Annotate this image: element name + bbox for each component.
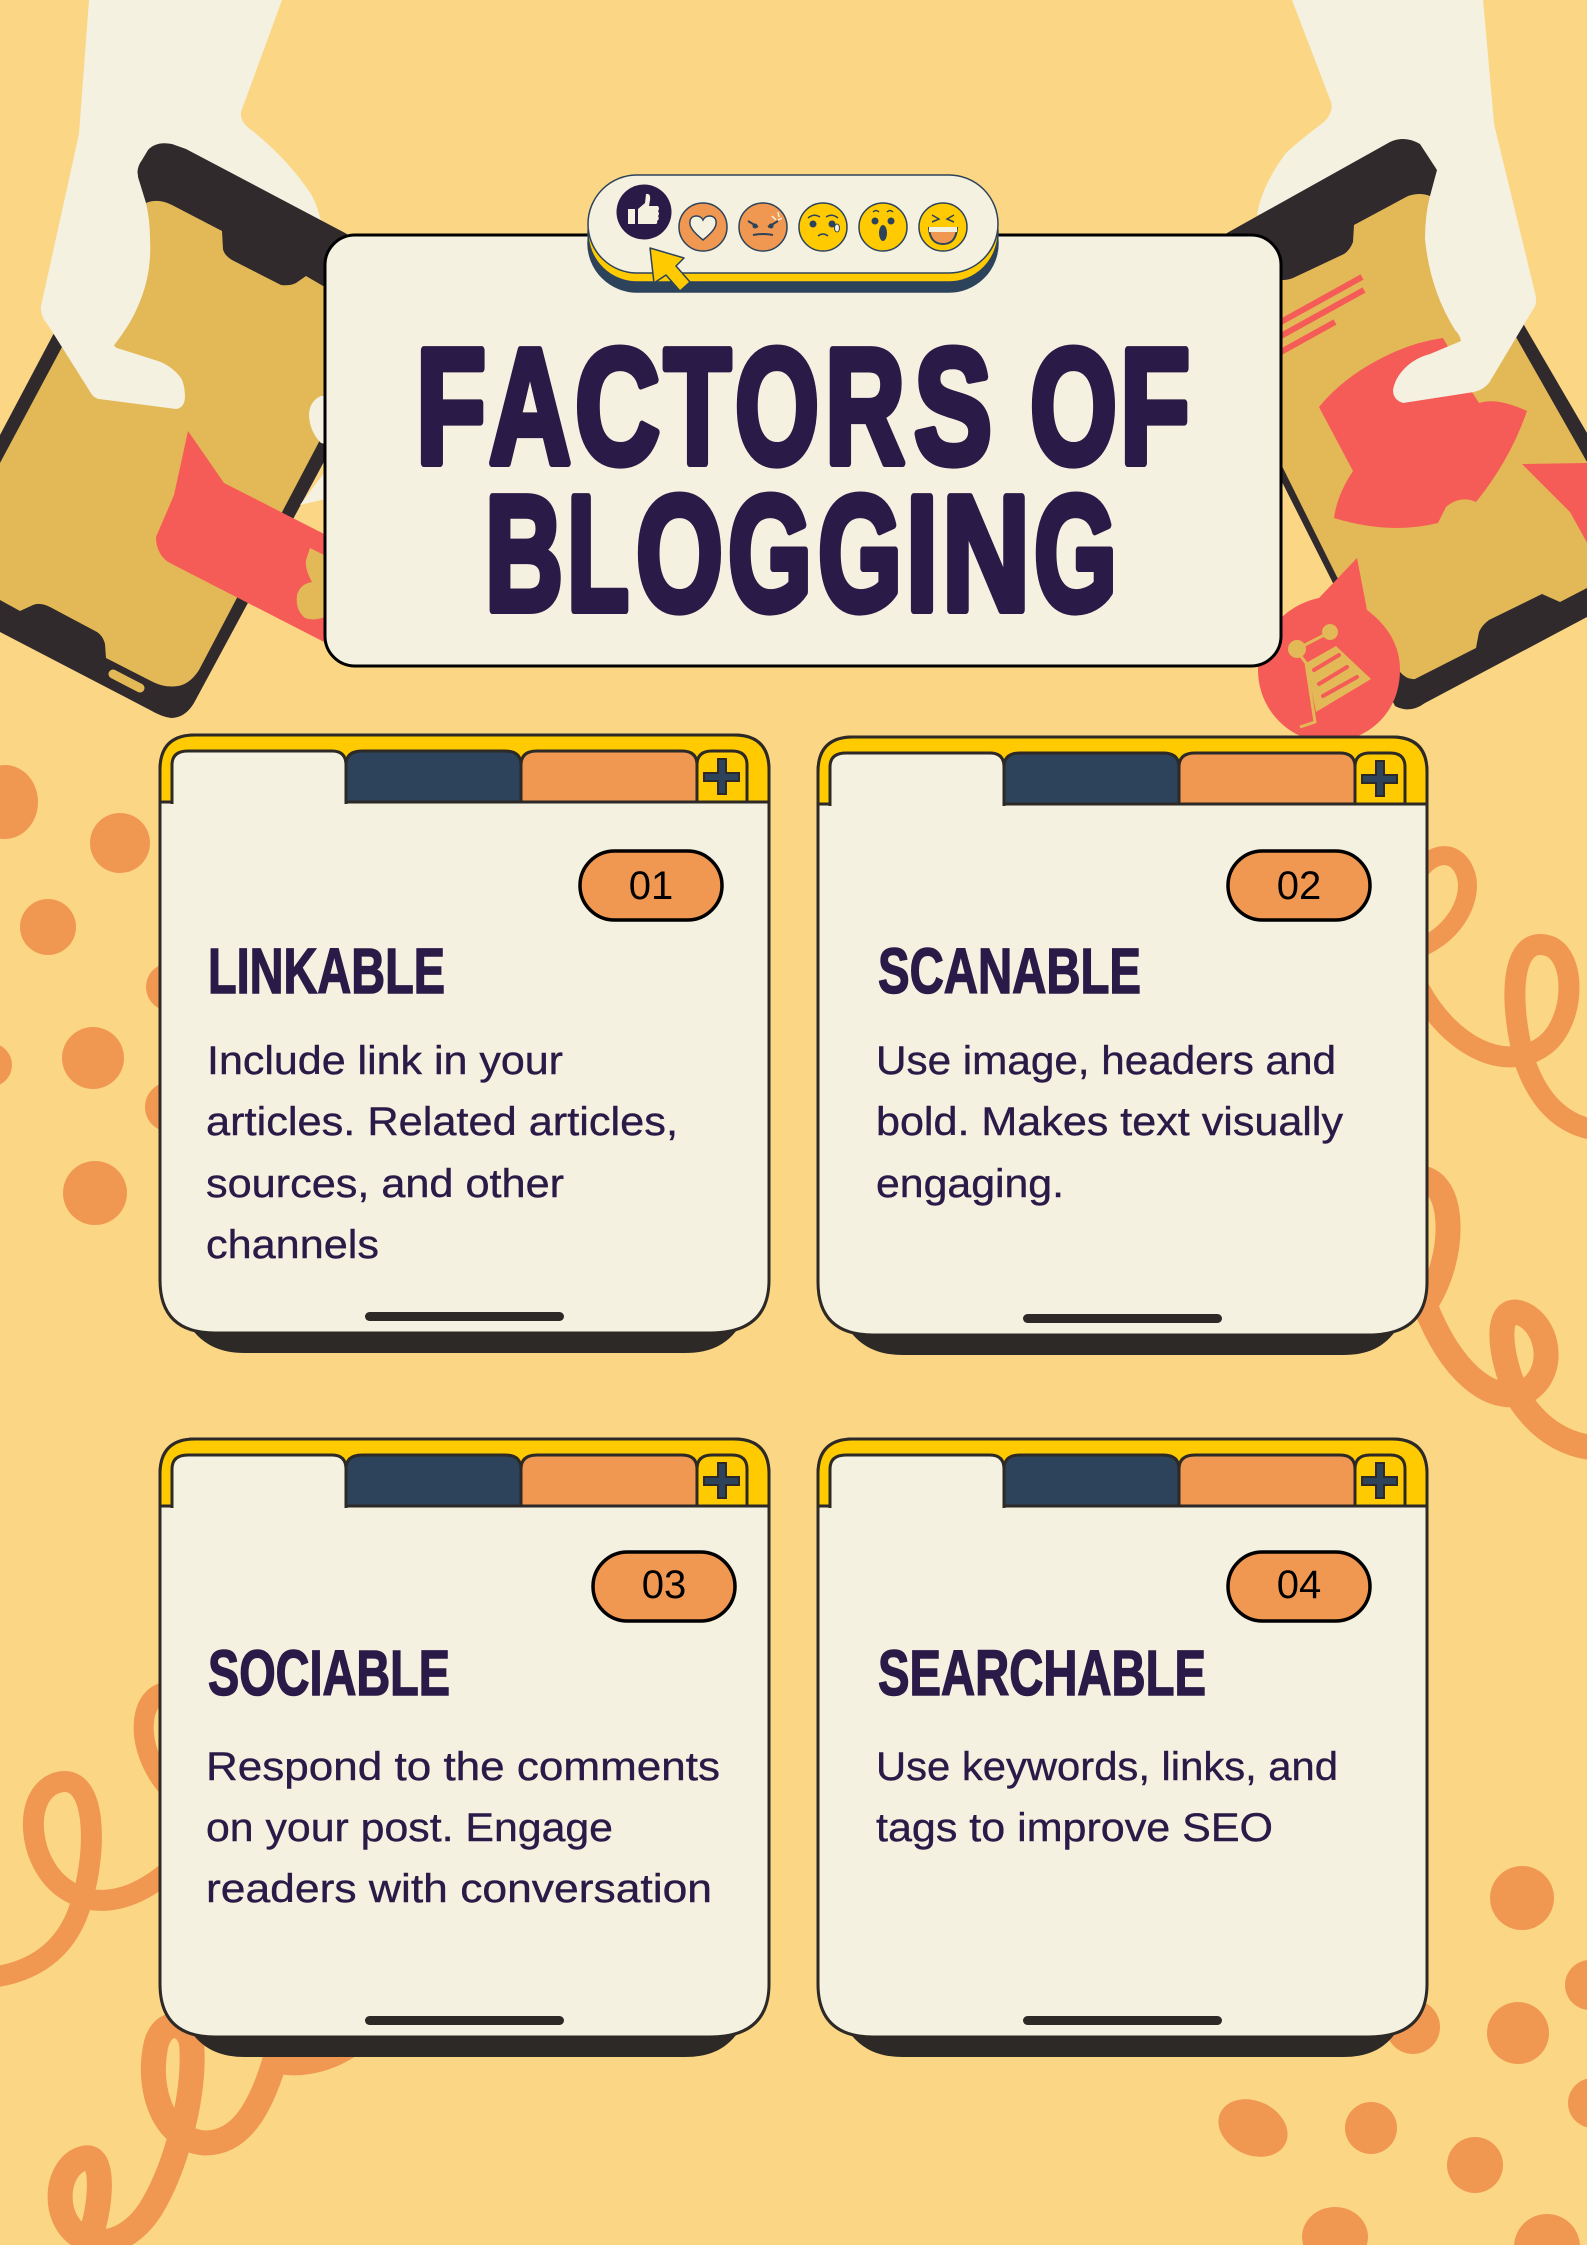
body text: on your post. Engage <box>206 1806 613 1850</box>
card frame <box>818 1439 1427 2057</box>
background dots: left <box>0 765 195 1225</box>
right hand back <box>1257 0 1494 215</box>
illustration: left hand holding phone <box>0 0 347 718</box>
panel: card 04 searchable <box>818 1439 1427 2057</box>
bar layers <box>588 175 998 292</box>
body text: engaging. <box>876 1162 1064 1206</box>
title line 1: A <box>489 315 571 498</box>
title line 1: C <box>575 315 660 498</box>
background dots: bottom right <box>1209 1866 1587 2245</box>
title line 1: T <box>664 315 731 498</box>
icon: sad reaction <box>799 203 847 251</box>
card frame <box>160 1439 769 2057</box>
icon: laugh reaction <box>919 203 967 251</box>
red corner bubble <box>1522 463 1587 548</box>
title line 2: G <box>1034 462 1117 645</box>
card frame <box>818 737 1427 1355</box>
background curls: bottom left <box>0 1692 350 2245</box>
body text: tags to improve SEO <box>876 1806 1273 1850</box>
heading: SCANABLE <box>878 935 1141 1007</box>
card frame <box>160 735 769 1353</box>
body text: sources, and other <box>206 1162 564 1206</box>
bubble <box>1258 558 1400 742</box>
heading: LINKABLE <box>208 935 445 1007</box>
screen text lines <box>1270 277 1364 358</box>
title line 1: O <box>1030 315 1117 498</box>
number badge: 04 <box>1277 1563 1321 1607</box>
icon: wow reaction <box>859 203 907 251</box>
speech bubble with note <box>1258 558 1400 742</box>
left phone speaker <box>113 674 140 688</box>
body text: channels <box>206 1223 379 1267</box>
title line 2: B <box>485 462 563 645</box>
left side fingertip <box>300 396 330 505</box>
red shape on screen <box>1319 338 1527 528</box>
panel: card 01 linkable <box>160 735 769 1353</box>
title line 1: O <box>735 315 819 498</box>
icon: love reaction <box>679 203 727 251</box>
body text: readers with conversation <box>206 1867 712 1911</box>
title line 2: N <box>942 462 1030 645</box>
body text: Use image, headers and <box>876 1039 1336 1083</box>
number badge <box>1228 851 1370 920</box>
background curls: right <box>1420 856 1587 1448</box>
right hand fingers <box>1393 0 1536 403</box>
number badge: 03 <box>642 1563 686 1607</box>
title line 1: F <box>416 315 486 498</box>
icon: angry reaction <box>739 203 787 251</box>
icon: thumbs up <box>616 184 672 240</box>
body text: Use keywords, links, and <box>876 1745 1338 1789</box>
note lines <box>1314 655 1357 696</box>
note icon <box>1288 624 1371 727</box>
left speech bubble <box>156 431 330 645</box>
left phone screen <box>0 201 330 686</box>
number badge <box>580 851 722 920</box>
title line 2: L <box>567 462 629 645</box>
right phone screen <box>1270 194 1587 679</box>
illustration: right hand holding phone <box>1200 0 1587 742</box>
right phone body <box>1200 139 1587 709</box>
title line 2: I <box>906 462 938 645</box>
title line 2: G <box>818 462 902 645</box>
heading: SOCIABLE <box>208 1637 450 1709</box>
left hand fingers <box>41 0 185 409</box>
number badge <box>593 1552 735 1621</box>
heading: SEARCHABLE <box>878 1637 1206 1709</box>
title line 1: R <box>825 315 905 498</box>
panel: card 02 scanable <box>818 737 1427 1355</box>
number badge <box>1228 1552 1370 1621</box>
title line 2: G <box>728 462 812 645</box>
body text: Include link in your <box>207 1039 563 1083</box>
left hand back <box>89 0 325 240</box>
reaction bar <box>588 175 998 292</box>
body text: articles. Related articles, <box>206 1100 678 1144</box>
panel: card 03 sociable <box>160 1439 769 2057</box>
bubble cutout <box>297 548 330 619</box>
body text: bold. Makes text visually <box>876 1100 1343 1144</box>
title line 2: O <box>636 462 723 645</box>
body text: Respond to the comments <box>206 1745 720 1789</box>
title panel <box>325 235 1281 666</box>
left phone body <box>0 143 347 718</box>
title line 1: S <box>914 315 992 498</box>
number badge: 02 <box>1277 864 1321 908</box>
number badge: 01 <box>629 864 673 908</box>
title line 1: F <box>1120 315 1190 498</box>
icon: cursor arrow <box>650 248 690 291</box>
